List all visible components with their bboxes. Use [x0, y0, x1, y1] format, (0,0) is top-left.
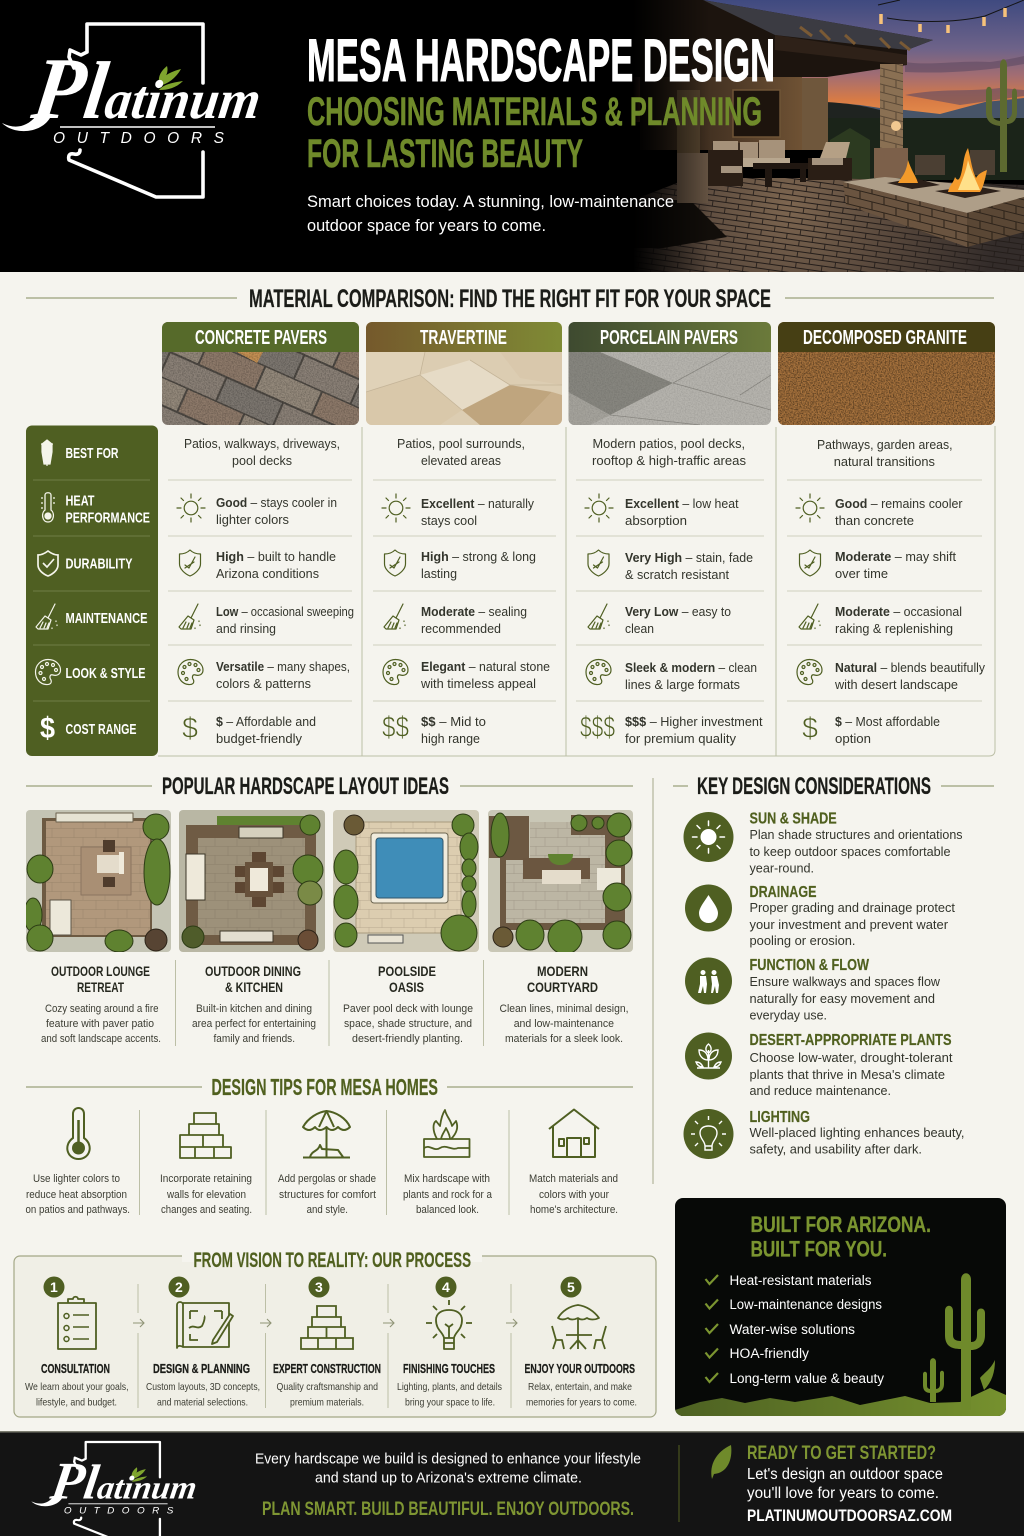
layout text: outdoor dining: OUTDOOR DINING: [205, 963, 301, 979]
material header: travertine: TRAVERTINE: [420, 327, 507, 349]
benefit list: Long-term value & beauty: [730, 1371, 884, 1386]
benefit list: [730, 1273, 884, 1386]
step 3: expert construction: EXPERT CONSTRUCTION: [273, 1362, 381, 1376]
sidebar labels: COST RANGE: [66, 721, 136, 738]
column: concrete pavers: budget-friendly: [216, 731, 302, 746]
sidebar labels: [66, 445, 150, 738]
column: travertine: High – strong & long: [421, 549, 536, 564]
column: porcelain pavers: Modern patios, pool decks,: [592, 436, 745, 451]
step 4: finishing touches: Lighting, plants, and details: [397, 1381, 502, 1393]
consideration: sun and shade: Plan shade structures and orientations: [750, 827, 963, 842]
sidebar labels: PERFORMANCE: [66, 510, 150, 526]
benefit list: Water-wise solutions: [730, 1322, 855, 1337]
footer logo: [31, 1442, 202, 1536]
criteria sidebar: [26, 426, 158, 756]
hero photo: evening patio scene: [600, 0, 1024, 272]
column: travertine: with timeless appeal: [420, 676, 536, 691]
step 5: enjoy your outdoors: Relax, entertain, and make: [528, 1381, 632, 1393]
column: decomposed granite: Pathways, garden areas,: [817, 437, 952, 452]
layout text: outdoor lounge: and soft landscape accents.: [41, 1033, 161, 1045]
layout text: modern courtyard: Clean lines, minimal design,: [500, 1003, 628, 1015]
footer statement: [255, 1450, 641, 1486]
column: decomposed granite: raking & replenishing: [835, 621, 953, 636]
cost icons: $: [182, 712, 198, 745]
footer statement: Every hardscape we build is designed to enhance your lifestyle: [255, 1450, 641, 1468]
column: decomposed granite: than concrete: [835, 513, 914, 528]
consideration: function and flow: [685, 957, 941, 1022]
header banner: [0, 0, 1024, 272]
step 1: consultation: We learn about your goals,: [25, 1381, 128, 1393]
callout: built for arizona: [675, 1198, 1006, 1416]
footer statement: and stand up to Arizona's extreme climate.: [315, 1470, 582, 1486]
consideration: desert plants: plants that thrive in Mesa's climate: [750, 1067, 945, 1082]
column: decomposed granite: Natural – blends beautifully: [835, 660, 985, 675]
column: decomposed granite: Good – remains cooler: [835, 496, 963, 511]
column: concrete pavers: [184, 436, 354, 746]
consideration: sun and shade: [684, 810, 963, 876]
step 5: enjoy your outdoors: 5: [567, 1279, 575, 1295]
heading: material comparison: MATERIAL COMPARISON: FIND THE RIGHT FIT FOR YOUR SPACE: [249, 285, 771, 313]
sidebar labels: HEAT: [66, 492, 94, 510]
layout plan: poolside oasis: [333, 810, 479, 952]
step 3: expert construction: premium materials.: [290, 1396, 364, 1408]
tip: lighter colors: reduce heat absorption: [26, 1189, 127, 1201]
layout plan: modern courtyard: [488, 810, 633, 954]
footer: [0, 1431, 1024, 1536]
layout text: outdoor lounge: [41, 963, 161, 1045]
column: porcelain pavers: absorption: [625, 513, 687, 528]
icon: maintenance: [36, 604, 57, 629]
heading: design tips: DESIGN TIPS FOR MESA HOMES: [212, 1074, 438, 1100]
column: travertine: $$ – Mid to: [421, 714, 486, 729]
cost icons: [182, 711, 818, 745]
tip: retaining walls: Incorporate retaining: [160, 1173, 252, 1185]
tip: hardscape and plants: [403, 1110, 493, 1216]
layout text: outdoor lounge: RETREAT: [77, 979, 124, 995]
step 2: design and planning: [146, 1276, 260, 1408]
column: porcelain pavers: & scratch resistant: [625, 567, 729, 582]
subtitle: FOR LASTING BEAUTY: [307, 132, 583, 176]
tip: match architecture: home's architecture.: [530, 1204, 618, 1216]
step 1: consultation: [25, 1276, 128, 1408]
step 1: consultation: lifestyle, and budget.: [36, 1396, 117, 1408]
column: travertine: Moderate – sealing: [421, 604, 527, 619]
column: porcelain pavers: Very High – stain, fade: [625, 550, 753, 565]
material header: concrete pavers: [162, 322, 359, 425]
icon: durability: [38, 551, 58, 576]
consideration: function and flow: Ensure walkways and spaces flow: [750, 974, 941, 989]
material header: porcelain pavers: PORCELAIN PAVERS: [600, 327, 738, 349]
sidebar labels: MAINTENANCE: [66, 610, 148, 627]
column: concrete pavers: colors & patterns: [216, 676, 311, 691]
layout text: modern courtyard: MODERN: [537, 963, 588, 979]
comparison table: [26, 426, 995, 756]
icon: leaf: [711, 1445, 731, 1479]
column: travertine: stays cool: [421, 513, 477, 528]
consideration: sun and shade: SUN & SHADE: [750, 810, 837, 828]
consideration: drainage: pooling or erosion.: [750, 933, 856, 948]
column: porcelain pavers: clean: [625, 621, 654, 636]
icon: heat performance: [41, 493, 55, 522]
tagline: outdoor space for years to come.: [307, 216, 546, 235]
column: concrete pavers: Low – occasional sweeping: [216, 604, 354, 619]
column: concrete pavers: lighter colors: [216, 512, 289, 527]
column: travertine: Patios, pool surrounds,: [397, 436, 525, 451]
column: concrete pavers: Good – stays cooler in: [216, 495, 337, 510]
step 3: expert construction: [273, 1276, 381, 1408]
layout text: poolside oasis: [343, 963, 473, 1045]
process arrows: [133, 1319, 517, 1327]
sidebar labels: BEST FOR: [66, 445, 119, 462]
consideration: lighting: safety, and usability after dark.: [750, 1142, 922, 1156]
tip: pergolas: structures for comfort: [279, 1189, 376, 1201]
layout text: poolside oasis: OASIS: [389, 979, 424, 995]
consideration: desert plants: [685, 1032, 953, 1098]
tip: hardscape and plants: plants and rock for a: [403, 1189, 493, 1201]
layout text: outdoor dining: area perfect for entertaining: [192, 1018, 316, 1030]
layout text: outdoor lounge: Cozy seating around a fire: [45, 1003, 158, 1015]
consideration: function and flow: FUNCTION & FLOW: [750, 957, 869, 974]
call to action: you'll love for years to come.: [747, 1485, 939, 1502]
layout text: outdoor lounge: OUTDOOR LOUNGE: [51, 963, 150, 979]
column: decomposed granite: [817, 437, 985, 746]
layout text: outdoor dining: [192, 963, 316, 1045]
consideration: drainage: Proper grading and drainage protect: [750, 900, 955, 915]
tip: pergolas: and style.: [307, 1204, 348, 1216]
step 2: design and planning: 2: [175, 1279, 183, 1295]
column: decomposed granite: natural transitions: [834, 454, 935, 469]
step 5: enjoy your outdoors: ENJOY YOUR OUTDOORS: [524, 1362, 635, 1376]
step 2: design and planning: Custom layouts, 3D concepts,: [146, 1381, 260, 1393]
tagline: [307, 192, 674, 235]
column: porcelain pavers: Excellent – low heat: [625, 496, 739, 511]
column: porcelain pavers: [592, 436, 763, 746]
cost icons: $$: [382, 711, 409, 744]
column: porcelain pavers: rooftop & high-traffic areas: [592, 453, 747, 468]
column: decomposed granite: option: [835, 731, 871, 746]
layout plan: outdoor lounge: [24, 810, 171, 952]
layout text: poolside oasis: Paver pool deck with lounge: [343, 1003, 473, 1015]
layout text: outdoor dining: Built-in kitchen and dining: [196, 1003, 312, 1015]
column: decomposed granite: Moderate – may shift: [835, 549, 956, 564]
benefit list: Heat-resistant materials: [730, 1273, 872, 1288]
step 5: enjoy your outdoors: memories for years to come.: [526, 1396, 637, 1408]
layout plan: outdoor dining: [179, 810, 325, 952]
consideration: drainage: your investment and prevent water: [750, 917, 949, 932]
consideration: drainage: DRAINAGE: [750, 884, 816, 901]
tip: lighter colors: on patios and pathways.: [26, 1204, 130, 1216]
step 1: consultation: CONSULTATION: [41, 1362, 110, 1376]
column: travertine: Elegant – natural stone: [421, 659, 550, 674]
column: concrete pavers: $ – Affordable and: [216, 714, 316, 729]
consideration: lighting: [684, 1109, 964, 1159]
icon: cost range: $: [40, 712, 55, 745]
tip: lighter colors: Use lighter colors to: [33, 1173, 120, 1185]
layout text: outdoor dining: family and friends.: [214, 1033, 295, 1045]
tip: pergolas: [278, 1111, 376, 1216]
step 5: enjoy your outdoors: [524, 1276, 637, 1408]
consideration: sun and shade: year-round.: [750, 860, 814, 876]
column: travertine: lasting: [421, 566, 457, 581]
material header: concrete pavers: CONCRETE PAVERS: [195, 327, 327, 349]
consideration: lighting: LIGHTING: [750, 1109, 810, 1126]
tip: pergolas: Add pergolas or shade: [278, 1173, 376, 1185]
callout heading: BUILT FOR YOU.: [750, 1236, 887, 1262]
tip: hardscape and plants: balanced look.: [416, 1204, 479, 1216]
call to action: [747, 1443, 952, 1525]
column: porcelain pavers: Very Low – easy to: [625, 604, 731, 619]
cost icons: $: [802, 712, 818, 745]
tip: lighter colors: [26, 1108, 130, 1216]
layout text: poolside oasis: desert-friendly planting.: [352, 1033, 463, 1045]
consideration: drainage: [685, 884, 955, 948]
column: porcelain pavers: Sleek & modern – clean: [625, 660, 757, 675]
company logo: [2, 24, 269, 197]
consideration: function and flow: everyday use.: [750, 1008, 827, 1022]
sidebar labels: LOOK & STYLE: [66, 665, 146, 682]
column: decomposed granite: over time: [835, 566, 888, 581]
step 2: design and planning: and material selections.: [157, 1396, 248, 1408]
step 1: consultation: 1: [50, 1279, 58, 1295]
step 4: finishing touches: 4: [442, 1279, 450, 1295]
desert illustration: [675, 1273, 1006, 1416]
call to action: READY TO GET STARTED?: [747, 1443, 936, 1464]
callout heading: [750, 1212, 931, 1262]
material header: travertine: [366, 322, 562, 425]
icon: best for: [41, 440, 53, 466]
layout text: outdoor lounge: feature with paver patio: [46, 1018, 154, 1030]
sidebar labels: DURABILITY: [66, 556, 132, 572]
tagline: Smart choices today. A stunning, low-maintenance: [307, 192, 674, 211]
column: concrete pavers: High – built to handle: [216, 549, 336, 564]
tip: match architecture: colors with your: [539, 1189, 609, 1201]
column: decomposed granite: $ – Most affordable: [835, 714, 940, 729]
step 3: expert construction: Quality craftsmanship and: [276, 1381, 378, 1393]
subtitle: [307, 90, 762, 176]
column: concrete pavers: and rinsing: [216, 621, 276, 636]
column: porcelain pavers: for premium quality: [625, 731, 736, 746]
checkmarks: [706, 1275, 718, 1382]
tip: retaining walls: changes and seating.: [161, 1204, 252, 1216]
consideration: desert plants: DESERT-APPROPRIATE PLANTS: [750, 1032, 952, 1049]
footer slogan: PLAN SMART. BUILD BEAUTIFUL. ENJOY OUTDOORS.: [262, 1499, 634, 1520]
column: travertine: Excellent – naturally: [421, 496, 534, 511]
tip: match architecture: Match materials and: [529, 1173, 618, 1185]
heading: popular layout ideas: POPULAR HARDSCAPE LAYOUT IDEAS: [162, 773, 449, 800]
layout descriptions: [41, 960, 628, 1046]
consideration: sun and shade: to keep outdoor spaces comfortable: [750, 844, 950, 859]
layout text: modern courtyard: [500, 963, 628, 1045]
tip: retaining walls: walls for elevation: [166, 1189, 246, 1201]
column: travertine: elevated areas: [421, 453, 501, 468]
callout heading: BUILT FOR ARIZONA.: [750, 1212, 931, 1237]
column: concrete pavers: Versatile – many shapes,: [216, 659, 350, 674]
process panel: [14, 1249, 656, 1417]
material header: porcelain pavers: [568, 322, 771, 425]
column: concrete pavers: pool decks: [232, 453, 292, 468]
benefit list: Low-maintenance designs: [730, 1297, 882, 1312]
layout text: modern courtyard: and low-maintenance: [514, 1018, 614, 1030]
layout text: outdoor dining: & KITCHEN: [225, 979, 283, 995]
step 4: finishing touches: [397, 1276, 502, 1408]
table icons: [177, 494, 824, 685]
column: travertine: recommended: [421, 621, 501, 636]
column: concrete pavers: Patios, walkways, driveways,: [184, 436, 340, 451]
tip: match architecture: [529, 1110, 618, 1216]
benefit list: HOA-friendly: [730, 1346, 809, 1361]
layout text: modern courtyard: materials for a sleek look.: [505, 1033, 623, 1045]
column: porcelain pavers: lines & large formats: [625, 677, 740, 692]
column: travertine: high range: [421, 731, 480, 746]
column: decomposed granite: with desert landscape: [834, 677, 958, 692]
column: concrete pavers: Arizona conditions: [216, 566, 319, 581]
step 4: finishing touches: FINISHING TOUCHES: [403, 1362, 495, 1376]
step 2: design and planning: DESIGN & PLANNING: [153, 1362, 250, 1376]
layout text: poolside oasis: POOLSIDE: [378, 963, 436, 979]
column: porcelain pavers: $$$ – Higher investment: [625, 714, 763, 729]
cost icons: $$$: [580, 711, 615, 744]
process heading: FROM VISION TO REALITY: OUR PROCESS: [194, 1249, 471, 1272]
consideration: function and flow: naturally for easy movement and: [750, 991, 935, 1006]
call to action: PLATINUMOUTDOORSAZ.COM: [747, 1506, 952, 1525]
consideration: desert plants: Choose low-water, drought-tolerant: [750, 1050, 953, 1065]
step 4: finishing touches: bring your space to life.: [405, 1396, 495, 1408]
consideration: desert plants: and reduce maintenance.: [750, 1083, 891, 1098]
layout text: modern courtyard: COURTYARD: [527, 979, 598, 995]
icon: look and style: [36, 660, 60, 685]
layout text: poolside oasis: space, shade structure, and: [344, 1018, 472, 1030]
subtitle: CHOOSING MATERIALS & PLANNING: [307, 90, 762, 134]
design tips: [26, 1108, 618, 1216]
column: decomposed granite: Moderate – occasional: [835, 604, 962, 619]
step 3: expert construction: 3: [315, 1279, 323, 1295]
tip: hardscape and plants: Mix hardscape with: [404, 1173, 490, 1185]
material header: decomposed granite: [778, 322, 995, 425]
tip: retaining walls: [160, 1113, 252, 1216]
column: travertine: [397, 436, 550, 746]
consideration: lighting: Well-placed lighting enhances beauty,: [750, 1125, 964, 1140]
call to action: Let's design an outdoor space: [747, 1466, 943, 1483]
